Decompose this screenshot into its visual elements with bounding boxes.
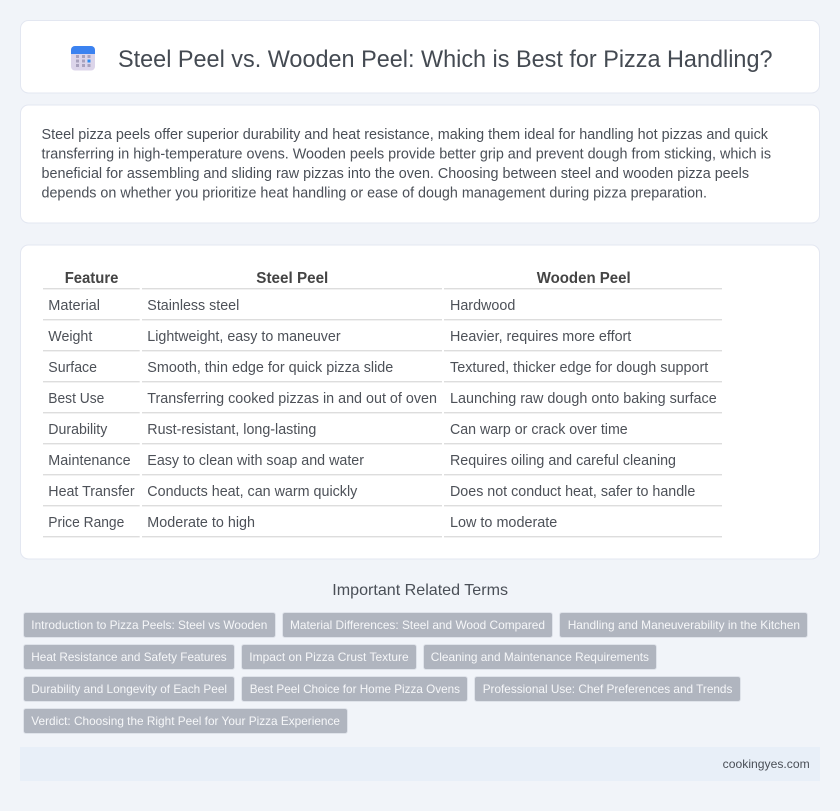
tag: Professional Use: Chef Preferences and Trends	[483, 682, 732, 696]
table row: heat transfer: Does not conduct heat, safer to handle	[450, 484, 695, 500]
table row: material	[43, 298, 722, 320]
table row: material: Stainless steel	[147, 298, 239, 314]
text block: introduction	[42, 127, 771, 202]
panel: introduction	[20, 105, 820, 223]
tag: Material Differences: Steel and Wood Compared	[290, 618, 545, 632]
text block: introduction: beneficial for assembling and sliding raw pizzas into the oven. Choosing between steel and wooden pizza peels	[42, 166, 749, 182]
text block: introduction: depends on whether you prioritize heat handling or ease of dough management during pizza preparation.	[42, 186, 707, 202]
table row: maintenance: Requires oiling and careful cleaning	[450, 453, 676, 469]
table row: material: Hardwood	[450, 298, 515, 314]
tag: Introduction to Pizza Peels: Steel vs Wooden	[31, 618, 267, 632]
tag	[474, 676, 740, 702]
table row: best use: Transferring cooked pizzas in and out of oven	[147, 391, 437, 407]
text block: introduction: transferring in high-temperature ovens. Wooden peels provide better grip and prevent dough from sticking, which is	[42, 146, 771, 162]
table row: material: Material	[48, 298, 100, 314]
tag	[24, 676, 234, 702]
related term tags	[24, 612, 808, 734]
table row: best use: Best Use	[48, 391, 104, 407]
tag	[424, 644, 656, 670]
table row: best use	[43, 391, 722, 413]
text block: introduction: Steel pizza peels offer superior durability and heat resistance, making them ideal for handling hot pizzas and quick	[42, 127, 769, 143]
table row: heat transfer	[43, 484, 722, 506]
tag	[560, 612, 808, 638]
table row: surface: Textured, thicker edge for dough support	[450, 360, 708, 376]
tag: Heat Resistance and Safety Features	[31, 650, 227, 664]
tag	[24, 644, 234, 670]
footer: cookingyes.com	[723, 757, 810, 771]
table row: price range: Moderate to high	[147, 515, 255, 531]
icon: calendar	[71, 46, 95, 70]
tag	[242, 644, 416, 670]
footer	[20, 747, 820, 781]
table row: weight: Weight	[48, 329, 92, 345]
table row: durability	[43, 422, 722, 444]
table row: price range: Low to moderate	[450, 515, 557, 531]
table row: maintenance: Maintenance	[48, 453, 131, 469]
table row: heat transfer: Heat Transfer	[48, 484, 135, 500]
table header row: Feature	[65, 270, 119, 287]
panel: comparison table	[20, 245, 820, 559]
tag	[242, 676, 468, 702]
table row: heat transfer: Conducts heat, can warm quickly	[147, 484, 358, 500]
tag: Impact on Pizza Crust Texture	[249, 650, 409, 664]
table row: surface	[43, 360, 722, 382]
table header row: Wooden Peel	[537, 270, 631, 287]
table row: best use: Launching raw dough onto baking surface	[450, 391, 717, 407]
table row: surface: Smooth, thin edge for quick pizza slide	[147, 360, 393, 376]
table row: price range	[43, 515, 722, 537]
table row: weight: Heavier, requires more effort	[450, 329, 631, 345]
tag	[24, 708, 348, 734]
table row: maintenance	[43, 453, 722, 475]
panel: header	[20, 20, 820, 93]
tag: Handling and Maneuverability in the Kitchen	[568, 618, 800, 632]
table row: price range: Price Range	[48, 515, 124, 531]
tag	[282, 612, 552, 638]
tag	[24, 612, 276, 638]
table row: maintenance: Easy to clean with soap and water	[147, 453, 364, 469]
title: Steel Peel vs. Wooden Peel: Which is Best for Pizza Handling?	[118, 46, 772, 73]
table row: durability: Can warp or crack over time	[450, 422, 628, 438]
table header row: Steel Peel	[256, 270, 328, 287]
table row: durability: Durability	[48, 422, 108, 438]
table row: weight: Lightweight, easy to maneuver	[147, 329, 341, 345]
table row: surface: Surface	[48, 360, 97, 376]
tag: Durability and Longevity of Each Peel	[31, 682, 227, 696]
tag: Verdict: Choosing the Right Peel for Your Pizza Experience	[31, 714, 340, 728]
tag: Cleaning and Maintenance Requirements	[431, 650, 649, 664]
tag: Best Peel Choice for Home Pizza Ovens	[250, 682, 460, 696]
heading: important related terms: Important Related Terms	[332, 582, 508, 599]
table row: weight	[43, 329, 722, 351]
table row: durability: Rust-resistant, long-lasting	[147, 422, 316, 438]
table header row	[43, 270, 722, 289]
